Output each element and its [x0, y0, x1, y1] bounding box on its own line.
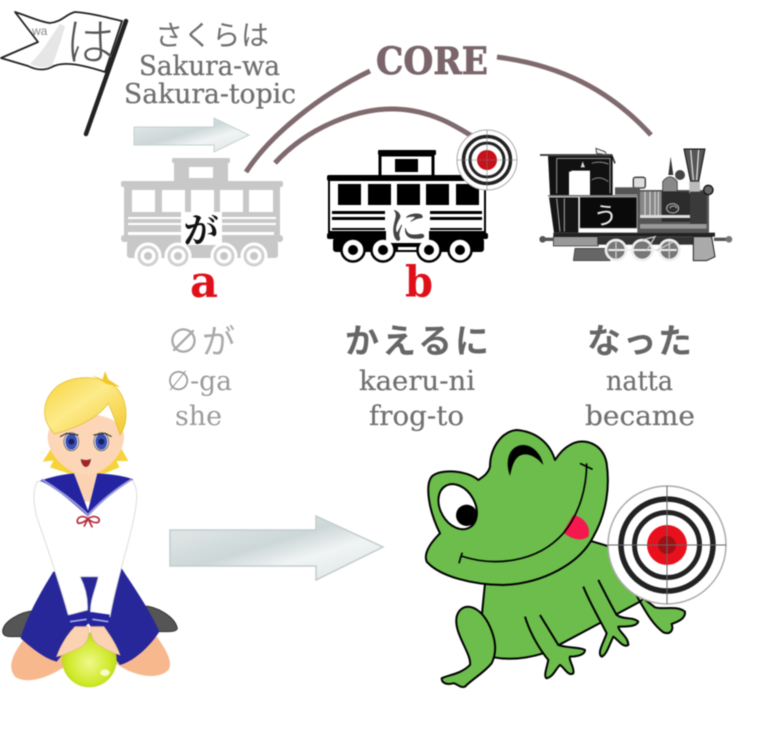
arc: core outer arc right [497, 57, 651, 135]
icon: small target [457, 130, 517, 190]
text: null ga gloss: ∅が [167, 323, 235, 360]
icon: black train car b: に [389, 206, 427, 248]
icon: black train car b [327, 150, 488, 262]
text: sakura-wa gloss: さくらは [155, 20, 269, 51]
text: null ga gloss [167, 323, 235, 432]
arc: inner arc to target [275, 109, 478, 163]
text: natta gloss: became [585, 401, 695, 432]
icon: wa topic flag: は [65, 15, 115, 71]
text: kaeru-ni gloss: frog-to [369, 401, 464, 432]
icon: steam locomotive [539, 148, 732, 261]
icon: large target [608, 486, 726, 604]
heading: core: CORE [376, 39, 488, 83]
text: sakura-wa gloss [124, 20, 296, 110]
text: natta gloss [585, 323, 695, 432]
illustration: girl in sailor uniform [3, 371, 177, 687]
illustration: green frog [426, 430, 685, 687]
text: kaeru-ni gloss: かえるに [345, 323, 489, 361]
text: sakura-wa gloss: Sakura-topic [124, 79, 296, 110]
arrow: small topic arrow [134, 118, 249, 152]
text: sakura-wa gloss: Sakura-wa [139, 51, 280, 82]
label: b: b [405, 258, 433, 308]
text: null ga gloss: ∅-ga [167, 366, 232, 397]
text: null ga gloss: she [175, 401, 222, 432]
icon: grey train car a: が [183, 212, 219, 251]
icon: steam locomotive: う [593, 203, 617, 230]
text: natta gloss: なった [587, 323, 692, 361]
text: kaeru-ni gloss [345, 323, 489, 432]
icon: grey train car a [121, 158, 283, 268]
icon: wa topic flag [1, 12, 126, 134]
arc: core outer arc left [246, 71, 370, 172]
arrow: large transformation arrow [170, 516, 383, 580]
icon: wa topic flag: wa [31, 24, 48, 38]
text: kaeru-ni gloss: kaeru-ni [359, 366, 475, 397]
text: natta gloss: natta [606, 366, 673, 397]
label: a: a [190, 257, 218, 308]
